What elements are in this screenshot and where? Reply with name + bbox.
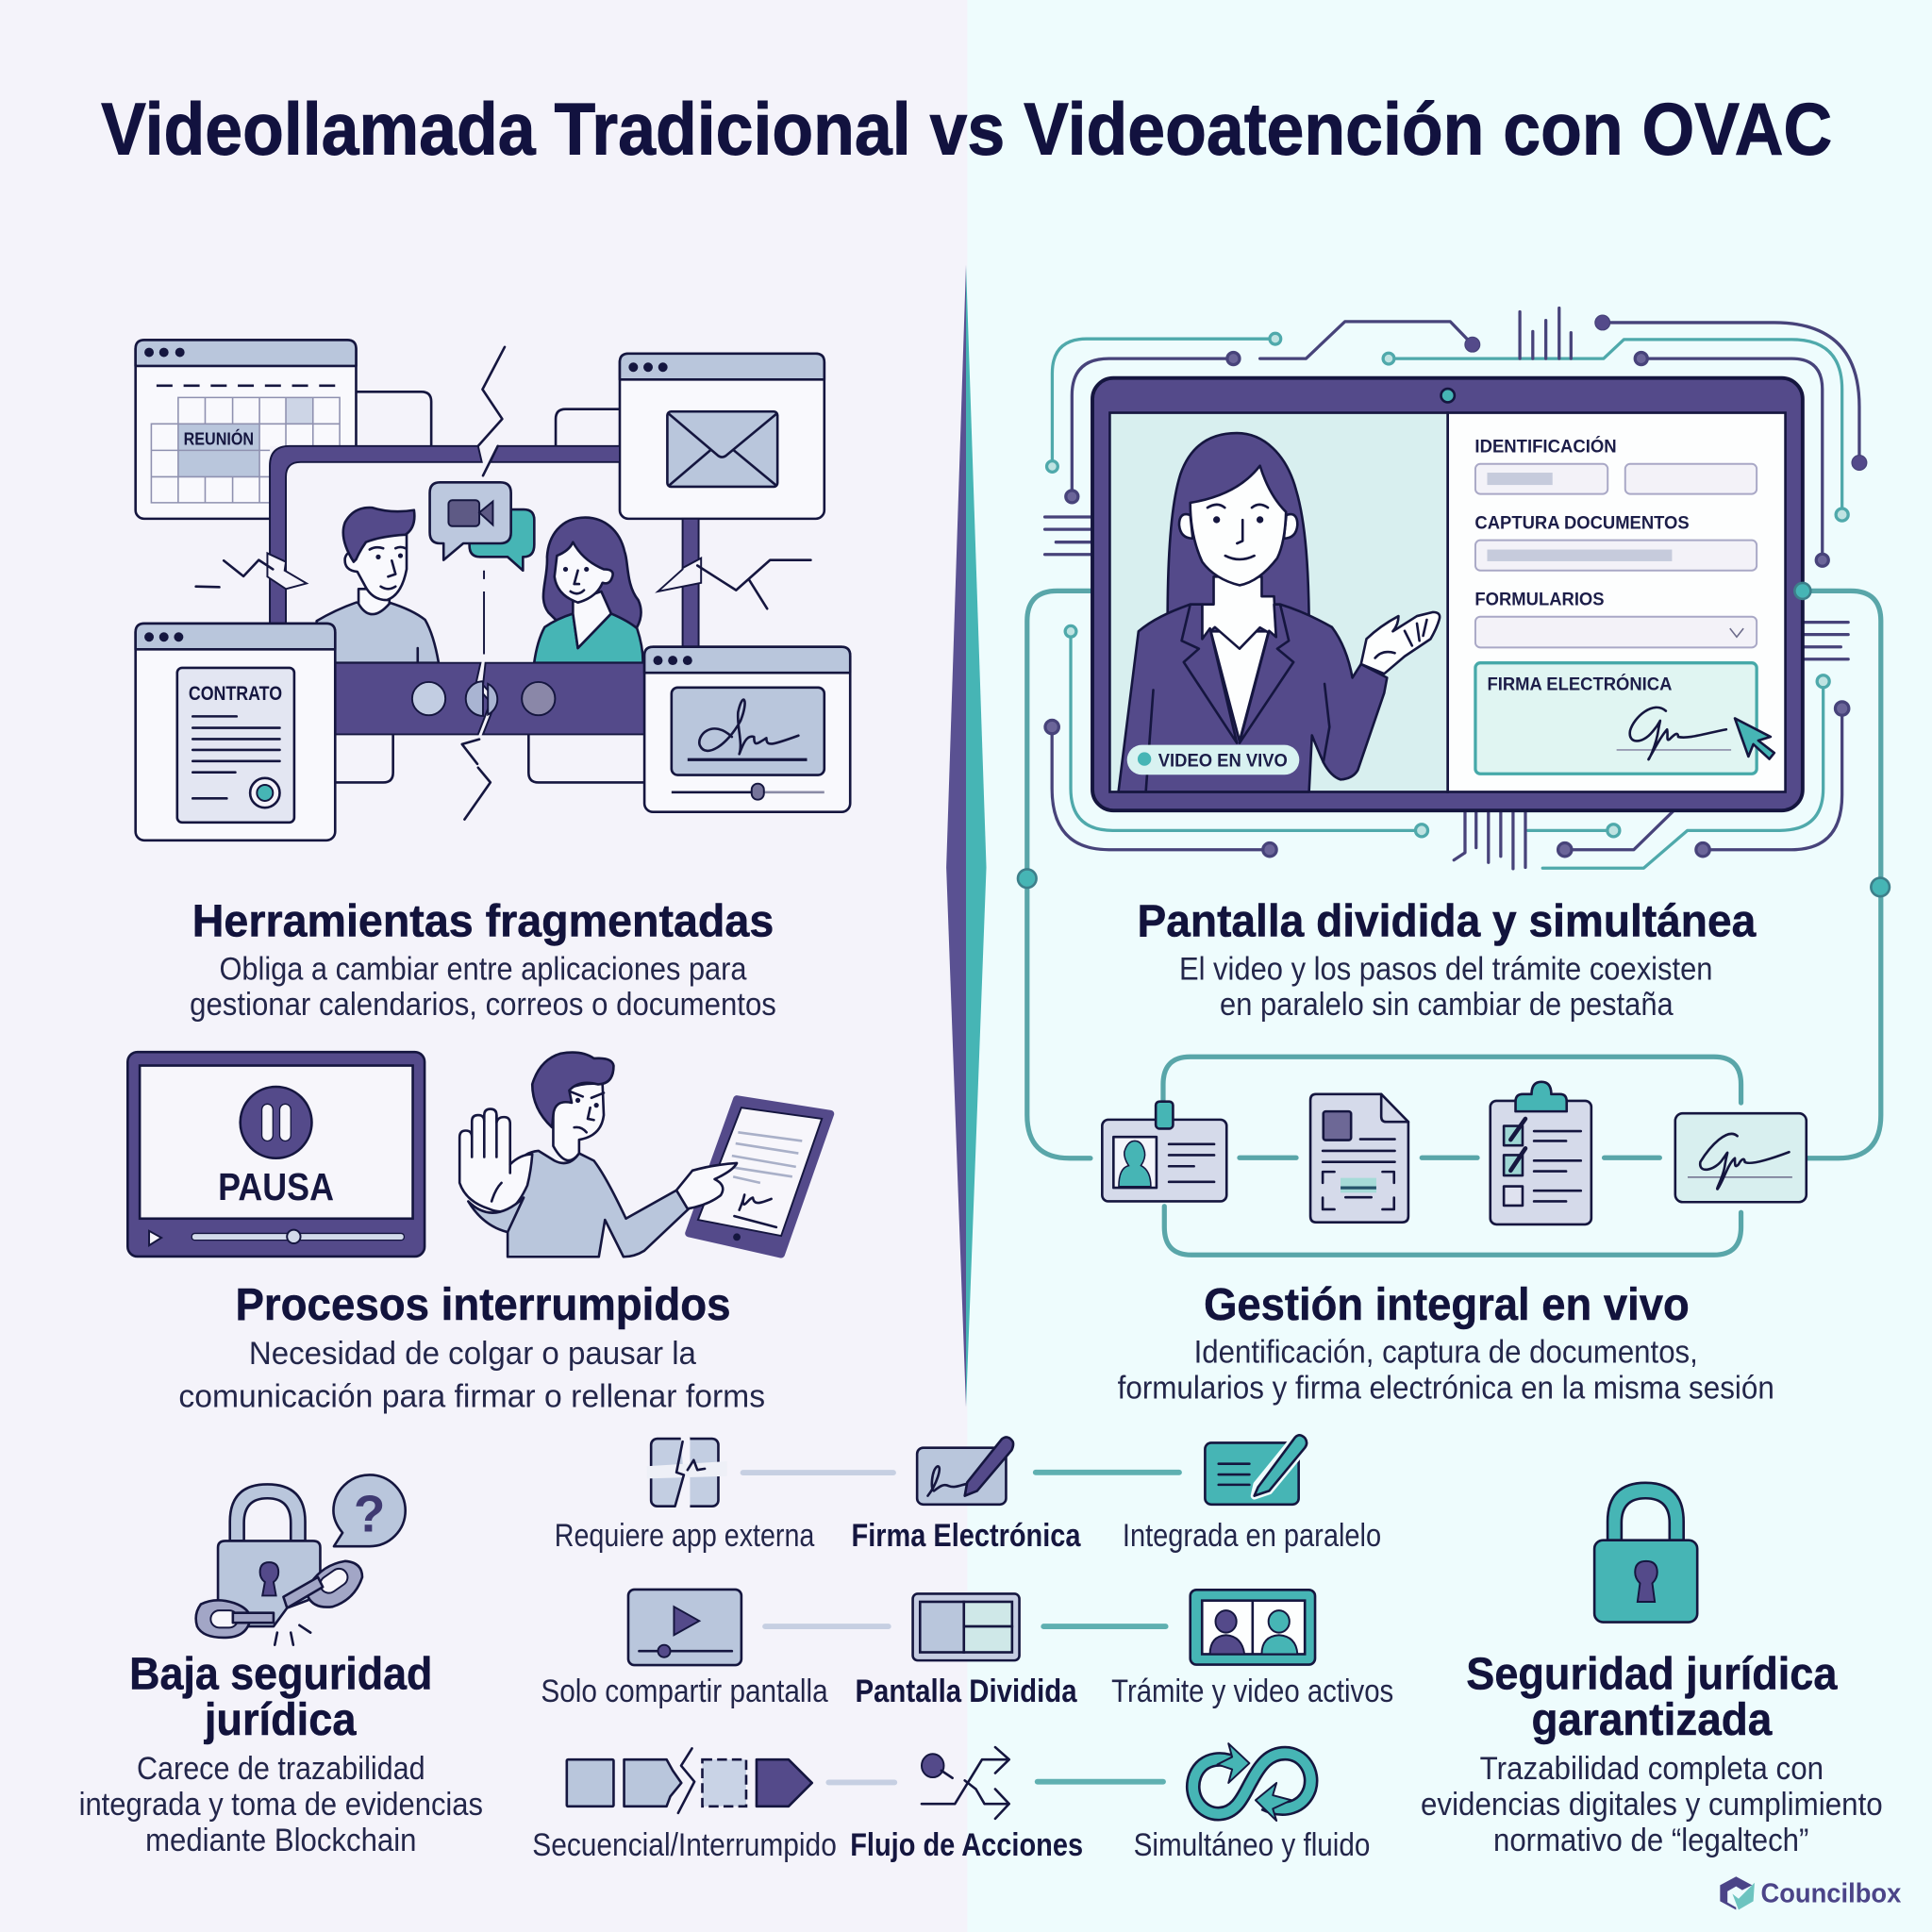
illustration: process flow loop xyxy=(1102,1057,1807,1255)
icon: sequential blocks xyxy=(567,1748,812,1813)
tablet frame xyxy=(1092,378,1810,810)
text: procesos description xyxy=(178,1336,765,1415)
icon: cursor xyxy=(1735,718,1774,759)
field: firma electronica xyxy=(1475,663,1757,774)
heading: seguridad juridica: Seguridad jurídica xyxy=(1466,1649,1838,1700)
text: gestion description xyxy=(1118,1335,1774,1406)
person: man xyxy=(317,508,439,663)
text: procesos description: comunicación para firmar o rellenar forms xyxy=(178,1379,765,1415)
raised hand xyxy=(459,1109,532,1211)
heading: gestion integral: Gestión integral en vivo xyxy=(1204,1279,1690,1330)
tear left xyxy=(267,553,307,589)
circuit traces xyxy=(1045,308,1867,869)
labels: Flujo de Acciones xyxy=(850,1827,1083,1863)
icon: chat bubbles with video camera xyxy=(430,482,534,571)
presenter woman xyxy=(1119,433,1440,791)
text: pantalla dividida description xyxy=(1179,951,1713,1023)
text: seguridad description: normativo de “legaltech” xyxy=(1493,1823,1808,1858)
text: herramientas description: Obliga a cambiar entre aplicaciones para xyxy=(219,951,747,987)
icon: secure lock xyxy=(1594,1483,1697,1623)
illustration: fragmented tools xyxy=(136,340,850,841)
icon: signature pen xyxy=(917,1437,1013,1505)
field: firma electronica: FIRMA ELECTRÓNICA xyxy=(1487,672,1672,694)
field: identificacion xyxy=(1474,434,1757,494)
heading: seguridad juridica: garantizada xyxy=(1532,1694,1773,1745)
labels: Pantalla Dividida xyxy=(855,1674,1078,1709)
text: gestion description: formularios y firma electrónica en la misma sesión xyxy=(1118,1370,1774,1406)
label: pausa: PAUSA xyxy=(218,1165,334,1208)
text: pantalla dividida description: El video y los pasos del trámite coexisten xyxy=(1179,951,1713,987)
labels xyxy=(555,1518,1381,1554)
field: formularios: FORMULARIOS xyxy=(1474,589,1605,609)
suit body and arm xyxy=(1119,605,1387,791)
window: calendar xyxy=(136,340,356,519)
heading: procesos interrumpidos: Procesos interrumpidos xyxy=(235,1279,731,1330)
monitor frame (broken) xyxy=(196,347,810,647)
monitor interior xyxy=(270,446,699,663)
labels: Trámite y video activos xyxy=(1111,1674,1393,1709)
labels: Simultáneo y fluido xyxy=(1134,1827,1370,1863)
heading: pantalla dividida: Pantalla dividida y simultánea xyxy=(1138,896,1757,947)
labels: Firma Electrónica xyxy=(852,1518,1081,1554)
label: contrato: CONTRATO xyxy=(189,683,282,705)
heading: seguridad juridica xyxy=(1466,1649,1838,1745)
face xyxy=(1179,514,1297,539)
background: right panel xyxy=(967,0,1932,1932)
connection loops xyxy=(1163,1057,1741,1255)
icon: shuffle flow xyxy=(922,1747,1009,1819)
icon: document scan xyxy=(1310,1094,1408,1223)
labels: Secuencial/Interrumpido xyxy=(532,1827,837,1863)
window: contract xyxy=(136,624,335,841)
text: baja seguridad description: integrada y toma de evidencias xyxy=(79,1787,483,1823)
text: baja seguridad description: mediante Blockchain xyxy=(145,1823,416,1858)
icon: infinity loop arrows xyxy=(1193,1743,1311,1821)
illustration: pause video player xyxy=(127,1052,425,1257)
background: left panel xyxy=(0,0,967,1932)
illustration: tablet with video call and circuits xyxy=(1018,308,1890,1158)
icon: signature card xyxy=(1675,1113,1807,1202)
text: seguridad description: Trazabilidad completa con xyxy=(1480,1751,1824,1787)
icon: pause xyxy=(241,1087,311,1158)
text: gestion description: Identificación, captura de documentos, xyxy=(1194,1335,1698,1371)
live video badge xyxy=(1127,745,1299,774)
open hand xyxy=(1361,612,1440,674)
field: captura documentos: CAPTURA DOCUMENTOS xyxy=(1474,512,1690,533)
comparison row: pantalla dividida xyxy=(541,1590,1393,1709)
icon: broken lock with question: ? xyxy=(354,1485,385,1543)
text: baja seguridad description: Carece de trazabilidad xyxy=(137,1751,425,1787)
label: reunion: REUNIÓN xyxy=(184,429,254,449)
heading: herramientas fragmentadas: Herramientas fragmentadas xyxy=(192,896,774,947)
heading: baja seguridad: jurídica xyxy=(204,1694,358,1745)
heading: baja seguridad xyxy=(129,1649,432,1745)
illustration: man signing on tablet xyxy=(459,1053,830,1257)
icon: split screen xyxy=(913,1593,1020,1660)
person: woman xyxy=(534,518,643,663)
tablet xyxy=(689,1099,830,1255)
pointing hand xyxy=(676,1163,737,1208)
labels: Solo compartir pantalla xyxy=(541,1674,828,1709)
window: signature xyxy=(644,647,850,812)
icon: broken lock with question xyxy=(196,1474,406,1645)
text: procesos description: Necesidad de colgar o pausar la xyxy=(249,1336,696,1372)
logo: councilbox: Councilbox xyxy=(1760,1879,1901,1909)
icon: checklist clipboard xyxy=(1491,1082,1591,1224)
icon: id card xyxy=(1102,1102,1226,1201)
text: pantalla dividida description: en paralelo sin cambiar de pestaña xyxy=(1220,987,1674,1023)
labels xyxy=(532,1827,1370,1863)
comparison row: flujo de acciones xyxy=(532,1743,1370,1863)
white shirt and collar xyxy=(1211,631,1269,741)
text: seguridad description xyxy=(1421,1751,1883,1858)
icon: screen share video xyxy=(628,1590,741,1665)
hair xyxy=(1168,433,1309,620)
head xyxy=(553,1084,604,1160)
field: captura documentos xyxy=(1474,512,1757,571)
live video badge: VIDEO EN VIVO xyxy=(1158,750,1288,771)
icon: broken app xyxy=(647,1429,727,1509)
center divider xyxy=(946,265,987,1407)
field: formularios xyxy=(1474,589,1757,647)
text: herramientas description xyxy=(190,951,776,1023)
labels: Integrada en paralelo xyxy=(1123,1518,1381,1554)
connector lines xyxy=(335,391,644,782)
form panel xyxy=(1474,434,1774,774)
labels xyxy=(541,1674,1393,1709)
tear right xyxy=(658,558,701,591)
monitor control bar (broken) xyxy=(335,663,644,820)
torso xyxy=(508,1151,689,1257)
window: email xyxy=(620,354,824,519)
text: seguridad description: evidencias digitales y cumplimiento xyxy=(1421,1787,1883,1823)
labels: Requiere app externa xyxy=(555,1518,814,1554)
big teal loop xyxy=(1018,591,1890,1158)
comparison row: firma electronica xyxy=(555,1429,1381,1554)
logo: councilbox xyxy=(1720,1876,1901,1909)
icon: integrated form xyxy=(1205,1435,1307,1505)
icon: two person video call xyxy=(1191,1590,1315,1665)
text: herramientas description: gestionar calendarios, correos o documentos xyxy=(190,987,776,1023)
heading: baja seguridad: Baja seguridad xyxy=(129,1649,432,1700)
field: identificacion: IDENTIFICACIÓN xyxy=(1474,434,1617,457)
text: baja seguridad description xyxy=(79,1751,483,1858)
lapels xyxy=(1182,605,1237,743)
